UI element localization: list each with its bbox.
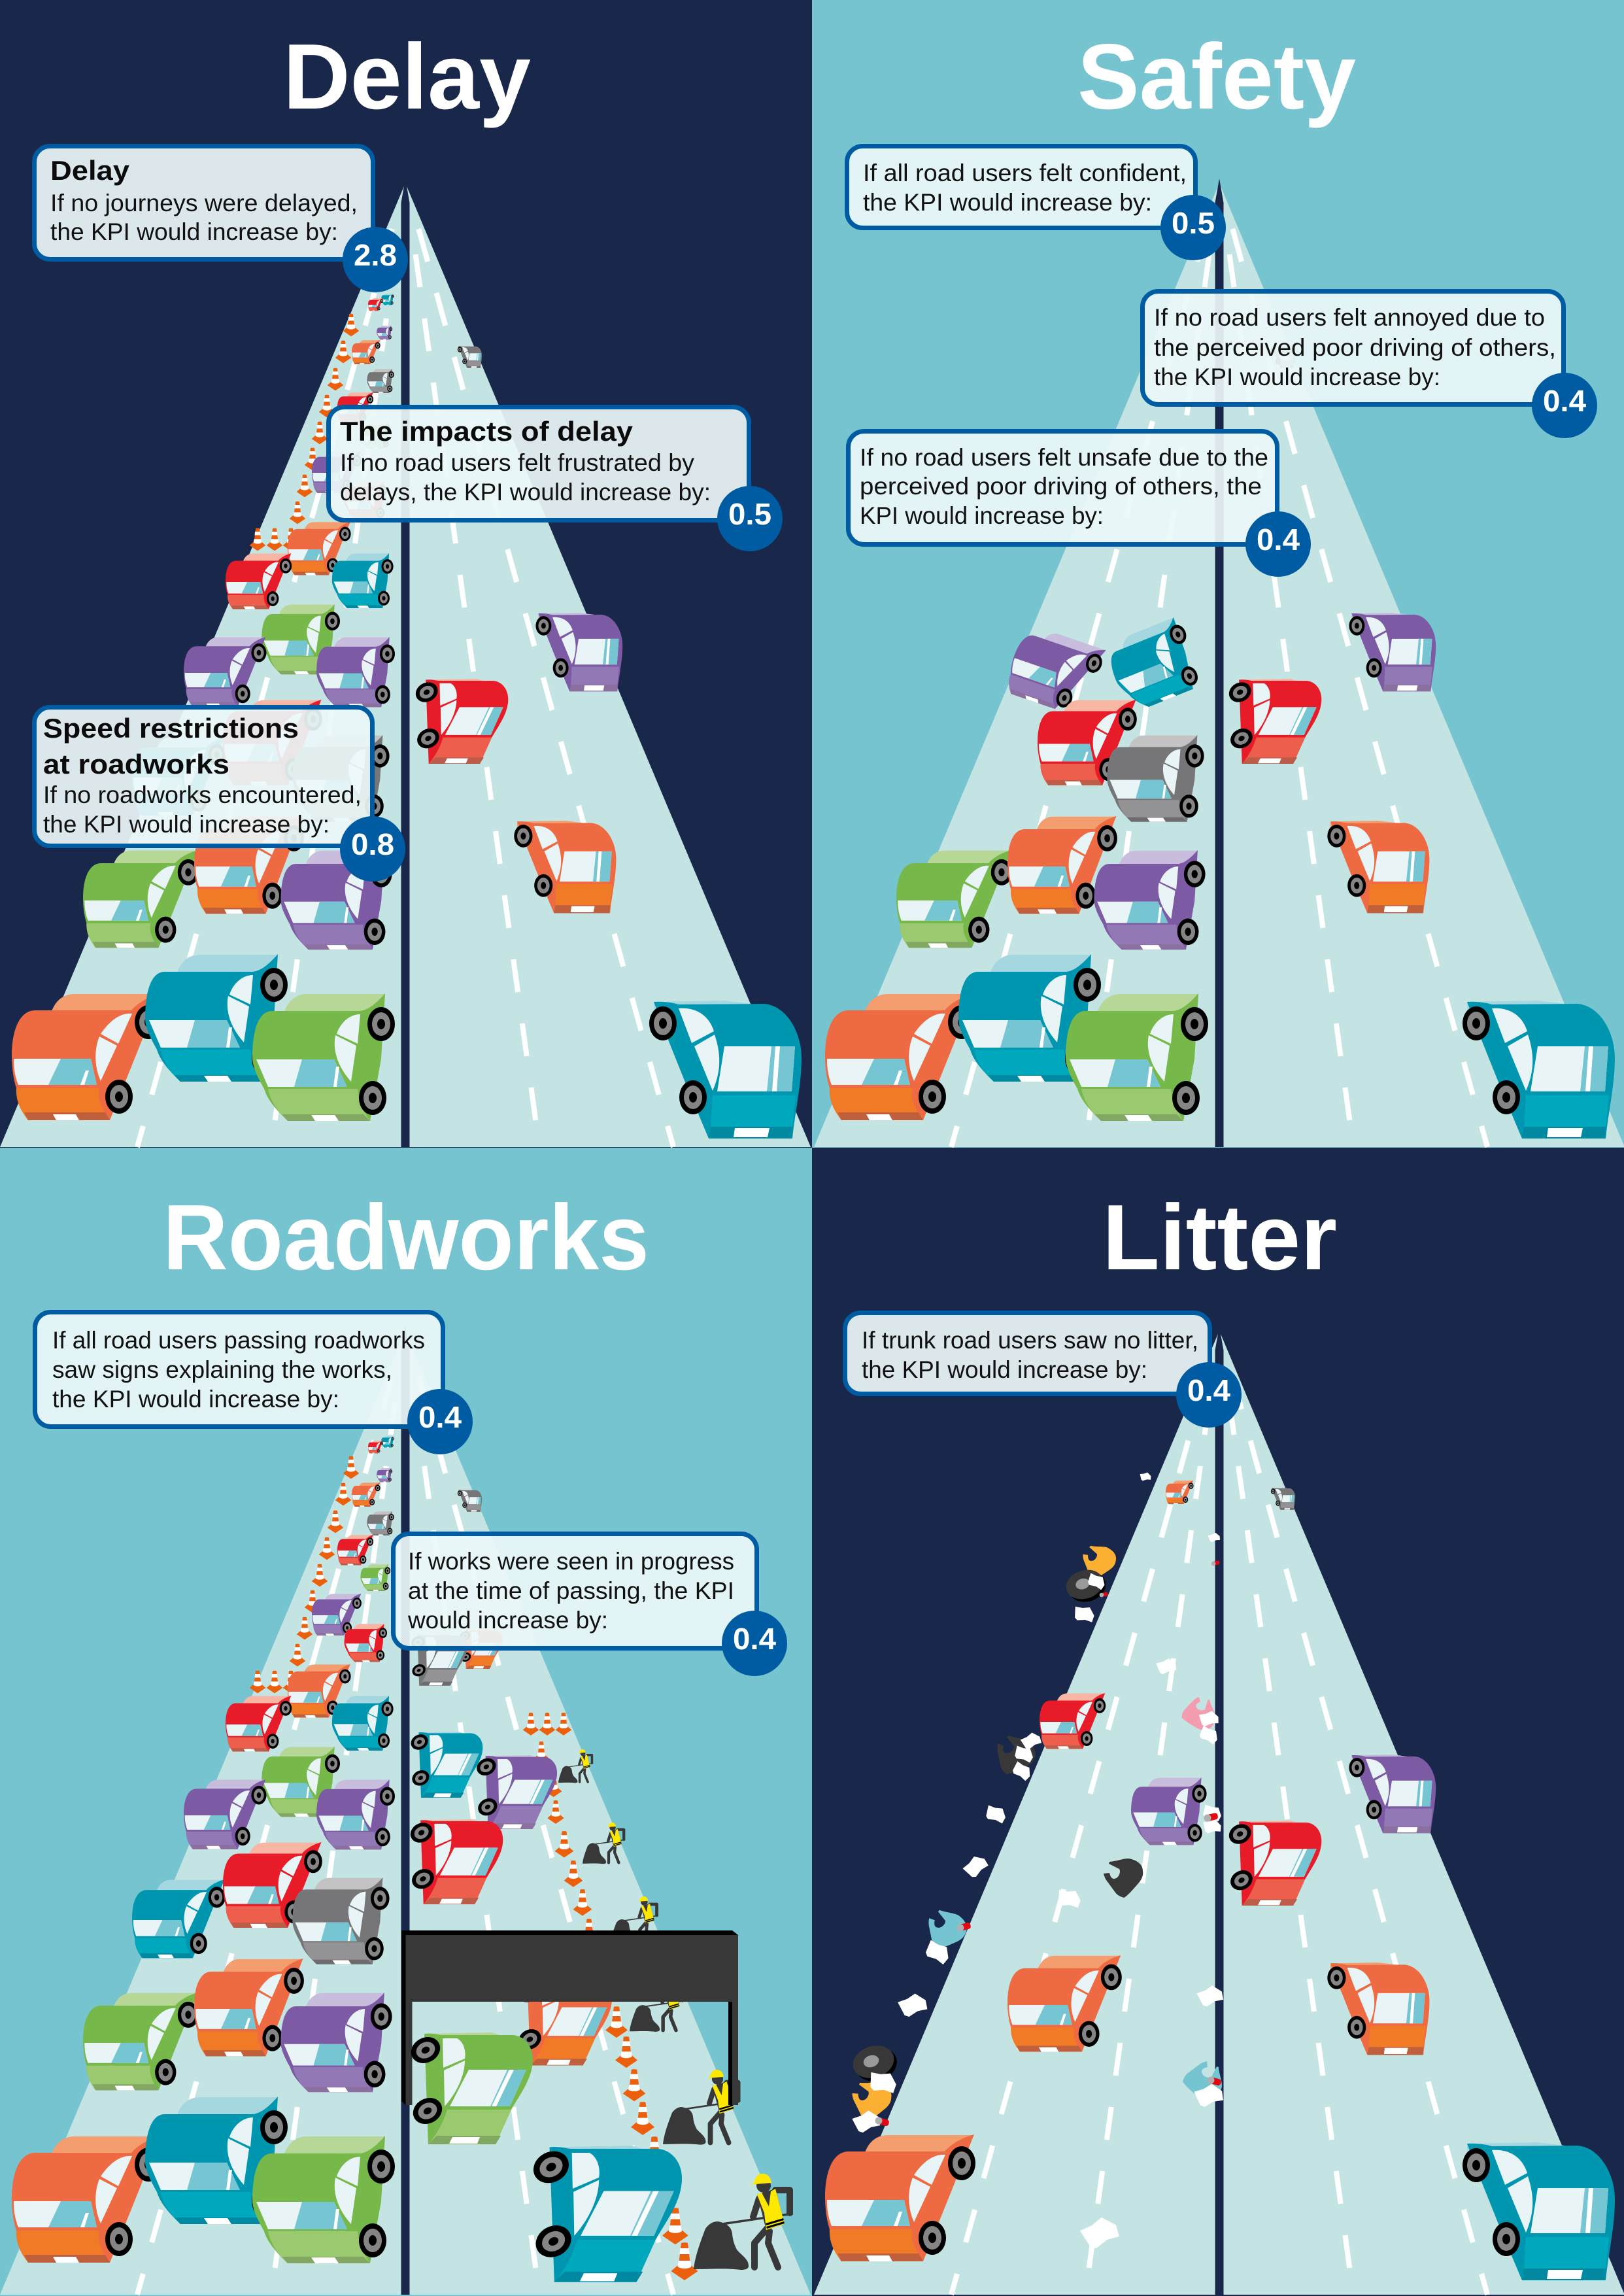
title: Safety: Safety [1077,25,1356,129]
callout: the impacts of delay: 0.5 [728,497,771,531]
callout: unsafe [849,432,1311,577]
title: Delay: Delay [283,25,531,129]
far grey car [458,1490,482,1512]
callout: annoyed: 0.4 [1543,384,1586,418]
callout: speed restrictions at roadworks [34,708,405,882]
queue of cars and cones on the left carriageway [12,1436,395,2263]
cone line [523,1713,698,2280]
cars on the right carriageway [1225,346,1615,1139]
cars on the left carriageway [825,1481,1207,2261]
callout: annoyed: the KPI would increase by: [1154,364,1440,390]
callout: annoyed [1143,292,1597,438]
callout: signs explaining the works: the KPI would increase by: [52,1386,339,1413]
callout: confident [847,146,1226,260]
roadworkers with spoil heaps [558,1749,793,2270]
callout: delay: If no journeys were delayed, [50,190,358,216]
crash pile of cars on the left carriageway [825,615,1208,1121]
callout: confident: 0.5 [1172,206,1215,240]
litter: bags [848,1542,1222,2124]
panel: safety [812,0,1624,1148]
callout: delay: the KPI would increase by: [50,218,338,245]
callout: delay: Delay [50,155,130,186]
callout: unsafe: perceived poor driving of others, the [860,473,1262,500]
title: Roadworks: Roadworks [163,1186,649,1290]
queue of cars and cones on the left carriageway [12,294,395,1121]
free-flowing cars on the right carriageway [412,346,802,1139]
callout: speed restrictions at roadworks: If no roadworks encountered, [43,781,362,808]
callout: confident: If all road users felt confident, [863,160,1187,186]
callout: delay [34,146,408,292]
callout: works seen in progress: would increase by: [407,1607,608,1634]
callout: no litter: If trunk road users saw no litter, [862,1327,1198,1354]
callout: speed restrictions at roadworks: Speed restrictions [43,713,299,744]
callout: signs explaining the works: If all road users passing roadworks [52,1327,425,1354]
panel: litter [812,1148,1624,2296]
callout: confident: the KPI would increase by: [863,189,1152,216]
cars on the right carriageway under the gantry [407,1732,612,2065]
panel: roadworks [0,1148,812,2296]
litter: paper [851,1473,1225,2252]
callout: the impacts of delay [328,407,783,551]
callout: signs explaining the works: saw signs explaining the works, [52,1356,392,1383]
near cars [407,2032,682,2282]
callout: signs explaining the works [35,1312,473,1454]
litter: cans [874,1560,1222,2127]
title: Litter: Litter [1102,1186,1337,1290]
callout: speed restrictions at roadworks: the KPI would increase by: [43,811,330,838]
callout: no litter: 0.4 [1187,1373,1230,1407]
callout: signs explaining the works: 0.4 [418,1400,462,1434]
callout: works seen in progress: 0.4 [733,1622,776,1656]
callout: works seen in progress: at the time of passing, the KPI [408,1577,734,1604]
callout: delay: 2.8 [354,238,397,272]
callout: the impacts of delay: If no road users felt frustrated by [340,449,695,476]
callout: no litter: the KPI would increase by: [862,1356,1147,1383]
callout: works seen in progress: If works were seen in progress [408,1548,734,1575]
callout: unsafe: KPI would increase by: [860,502,1104,529]
callout: unsafe: If no road users felt unsafe due to the [860,444,1268,471]
callout: speed restrictions at roadworks: 0.8 [351,827,394,861]
callout: the impacts of delay: The impacts of delay [340,416,634,447]
overhead gantry [401,1930,738,2105]
callout: the impacts of delay: delays, the KPI would increase by: [340,479,711,505]
callout: no litter [845,1313,1242,1428]
callout: annoyed: If no road users felt annoyed due to [1154,304,1545,331]
callout: speed restrictions at roadworks: at roadworks [43,749,229,780]
panel: delay [0,0,812,1148]
callout: unsafe: 0.4 [1257,523,1300,557]
litter: tyres [849,1565,1109,2087]
callout: annoyed: the perceived poor driving of others, [1154,334,1556,361]
callout: works seen in progress [394,1534,787,1676]
cars beyond the callout [409,1630,503,1686]
cars on the right carriageway [1225,1488,1615,2280]
